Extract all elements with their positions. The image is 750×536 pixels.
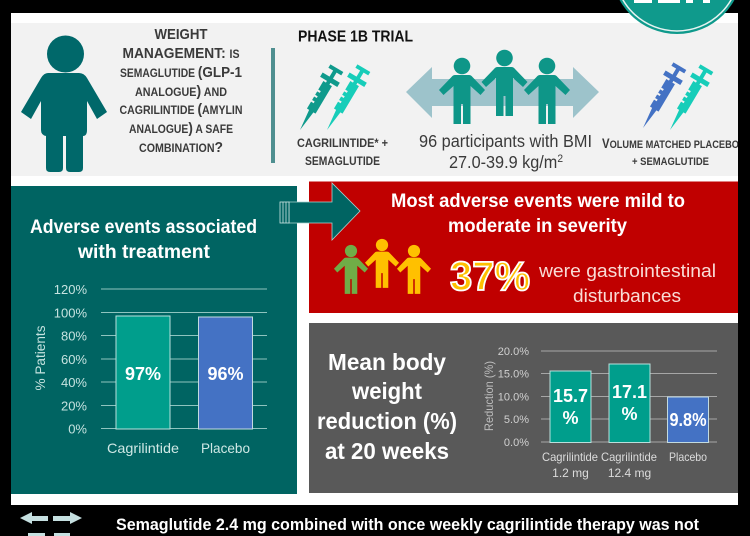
panel: severity bbox=[309, 182, 738, 313]
bar chart: adverse events: 0% bbox=[68, 422, 87, 436]
bar chart: adverse events: 80% bbox=[61, 328, 87, 344]
bar chart: adverse events: Cagrilintide bbox=[107, 440, 179, 456]
icon: syringes cagrilintide and semaglutide bbox=[291, 63, 372, 135]
bar chart: weight reduction: 15.0% bbox=[498, 368, 529, 380]
arrow: adverse events to severity bbox=[280, 183, 360, 240]
icon: three participants bbox=[439, 50, 570, 124]
label: cagrilintide plus semaglutide bbox=[297, 138, 388, 168]
heading: mean body weight reduction: reduction (%) bbox=[317, 408, 457, 434]
bar chart: adverse events: 97% bbox=[125, 364, 161, 384]
bar chart: weight reduction: Cagrilintide bbox=[542, 450, 598, 464]
text: weight management question: WEIGHT bbox=[154, 26, 208, 43]
label: volume matched placebo: + SEMAGLUTIDE bbox=[632, 156, 709, 168]
text: weight management question: MANAGEMENT: IS bbox=[122, 45, 240, 62]
bar chart: weight reduction: 15.7 bbox=[553, 386, 588, 406]
bar chart: weight reduction: 10.0% bbox=[498, 392, 529, 404]
icon: overweight person bbox=[21, 36, 107, 172]
text: weight management question: ANALOGUE) AND bbox=[135, 83, 227, 100]
text: weight management question bbox=[120, 26, 242, 156]
text: weight management question: CAGRILINTIDE (AMYLIN bbox=[120, 101, 242, 118]
text: weight management question: ANALOGUE) A SAFE bbox=[129, 120, 233, 137]
heading: severity bbox=[391, 191, 685, 237]
bar chart: weight reduction: Cagrilintide bbox=[601, 450, 657, 464]
heading: phase 1b trial: PHASE 1B TRIAL bbox=[298, 28, 413, 46]
bar chart: adverse events: Placebo bbox=[201, 440, 250, 456]
panel: top study summary bbox=[11, 23, 739, 176]
bar chart: adverse events bbox=[33, 282, 267, 456]
bar chart: weight reduction: % bbox=[562, 408, 579, 428]
bar chart: weight reduction: 17.1 bbox=[612, 382, 647, 402]
icon: bottom arrows bbox=[20, 512, 82, 536]
heading: mean body weight reduction: at 20 weeks bbox=[325, 438, 449, 464]
badge: top right circle logo bbox=[612, 0, 742, 34]
panel: adverse events bbox=[11, 186, 297, 494]
text: weight management question: COMBINATION? bbox=[139, 139, 223, 156]
heading: mean body weight reduction: weight bbox=[351, 378, 422, 404]
label: cagrilintide plus semaglutide: CAGRILINTIDE* + bbox=[297, 138, 388, 150]
text: conclusion: Semaglutide 2.4 mg combined with once weekly cagrilintide therapy was not bbox=[116, 516, 699, 534]
bar chart: adverse events: % Patients bbox=[33, 325, 48, 390]
bar chart: weight reduction: Placebo bbox=[669, 450, 707, 464]
icon: double-headed arrow bbox=[406, 67, 599, 118]
text: participants: 96 participants with BMI bbox=[419, 131, 592, 151]
bar chart: weight reduction bbox=[482, 346, 717, 480]
bar chart: adverse events: 60% bbox=[61, 352, 87, 367]
bar chart: weight reduction: 9.8% bbox=[670, 410, 706, 430]
heading: mean body weight reduction bbox=[317, 349, 457, 464]
label: volume matched placebo bbox=[602, 136, 739, 168]
bar chart: weight reduction: 20.0% bbox=[498, 346, 529, 358]
heading: adverse events bbox=[30, 217, 257, 263]
heading: adverse events: Adverse events associated bbox=[30, 217, 257, 238]
bar chart: adverse events: 20% bbox=[61, 398, 87, 414]
text: gastrointestinal disturbances bbox=[538, 261, 716, 306]
heading: severity: moderate in severity bbox=[448, 216, 627, 237]
icon: syringes placebo and semaglutide bbox=[634, 61, 715, 135]
text: participants: 27.0-39.9 kg/m bbox=[449, 152, 566, 172]
panel: body weight reduction bbox=[309, 323, 738, 493]
text: participants bbox=[419, 131, 592, 172]
text: participants: 2 bbox=[557, 153, 563, 165]
bar chart: weight reduction: % bbox=[621, 404, 638, 424]
bar chart: adverse events: 120% bbox=[54, 282, 87, 297]
stat: 37 percent: 37% bbox=[450, 253, 530, 299]
bar chart: adverse events: 40% bbox=[61, 375, 87, 390]
text: weight management question: SEMAGLUTIDE (GLP-1 bbox=[120, 64, 242, 81]
bar chart: weight reduction: 1.2 mg bbox=[552, 466, 589, 480]
icon: small group of people bbox=[334, 239, 431, 294]
heading: severity: Most adverse events were mild to bbox=[391, 191, 685, 212]
bar chart: adverse events: 96% bbox=[207, 364, 244, 384]
heading: adverse events: with treatment bbox=[77, 242, 211, 263]
bar chart: weight reduction: 5.0% bbox=[504, 414, 529, 426]
bar chart: weight reduction: 12.4 mg bbox=[608, 466, 651, 480]
label: cagrilintide plus semaglutide: SEMAGLUTIDE bbox=[305, 156, 380, 168]
heading: mean body weight reduction: Mean body bbox=[328, 349, 446, 375]
bar chart: weight reduction: Reduction (%) bbox=[482, 361, 496, 431]
text: gastrointestinal disturbances: were gastrointestinal bbox=[538, 261, 716, 281]
text: gastrointestinal disturbances: disturbances bbox=[573, 286, 681, 306]
bar chart: adverse events: 100% bbox=[54, 306, 87, 320]
bar chart: weight reduction: 0.0% bbox=[504, 437, 529, 449]
